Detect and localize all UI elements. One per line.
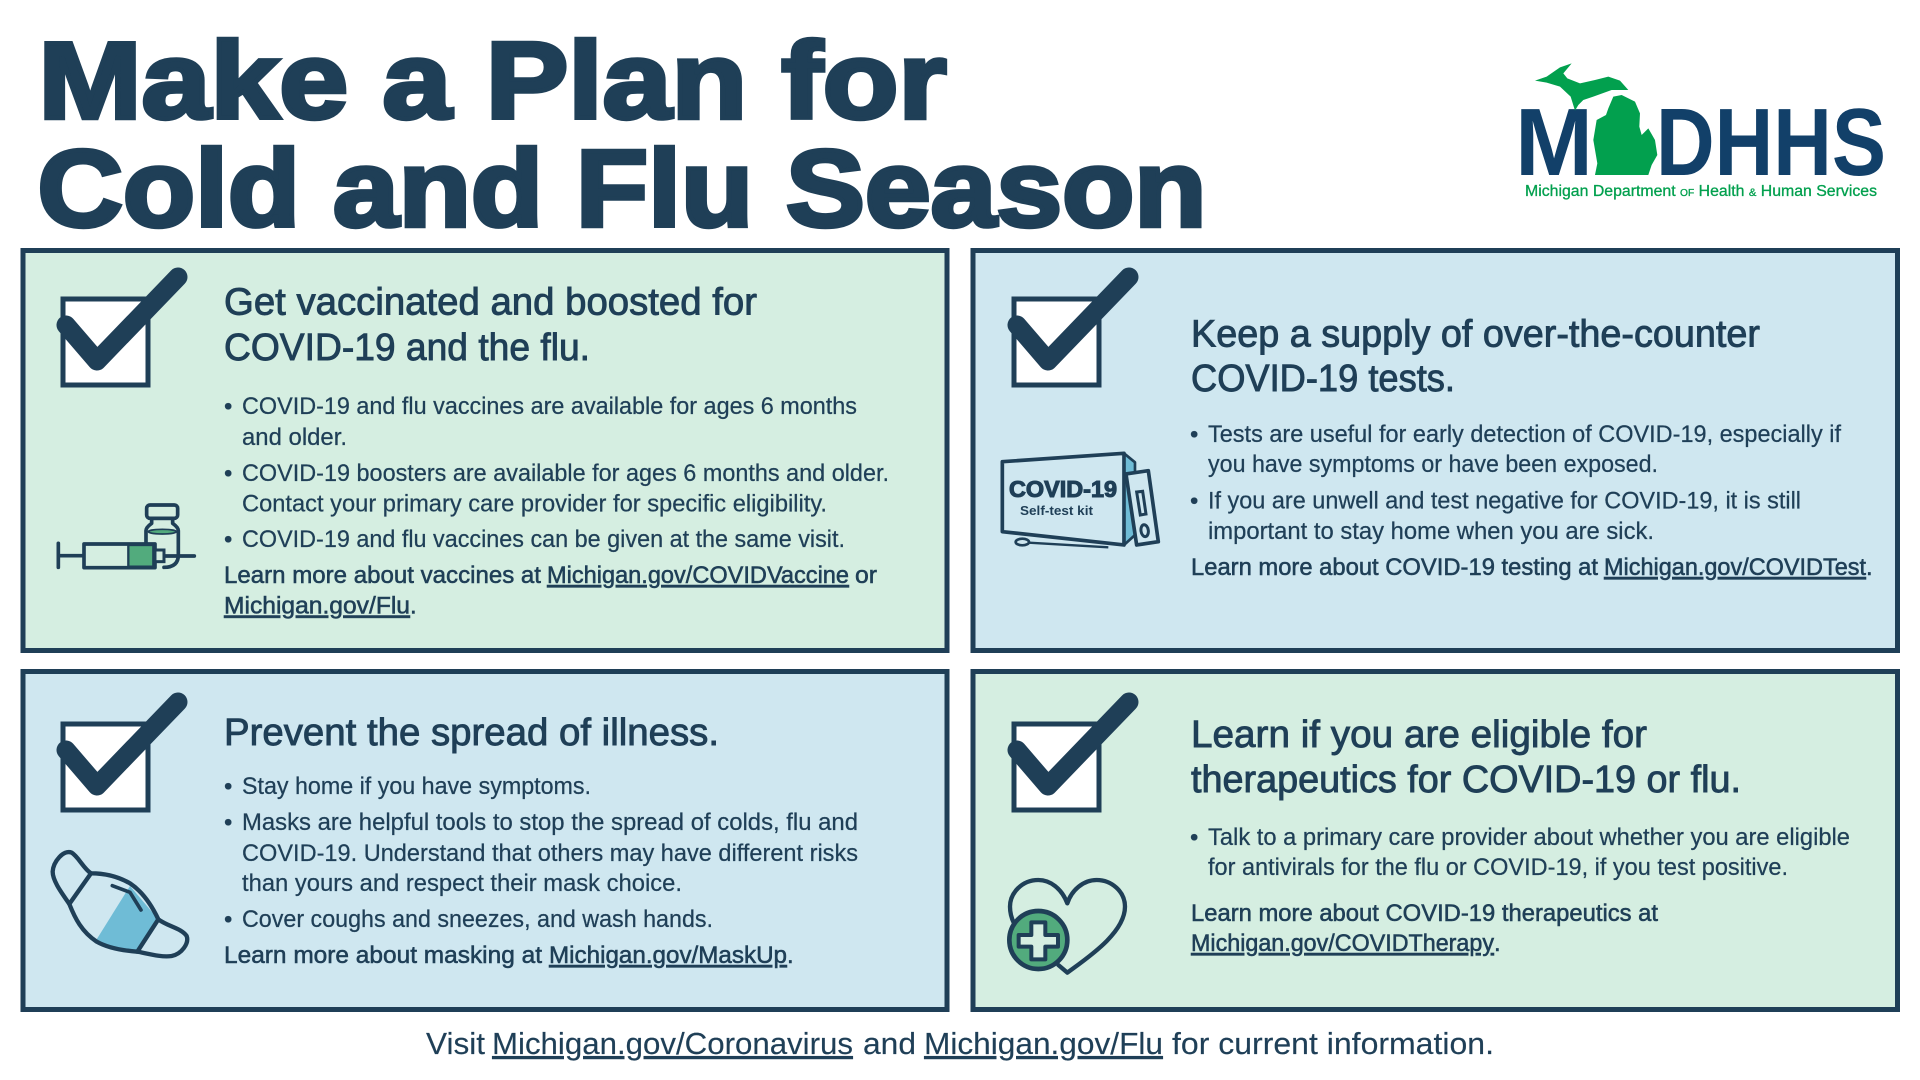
bullet list: • <box>224 773 232 800</box>
bullet list: • <box>1190 421 1198 448</box>
learn more link: . <box>410 592 417 620</box>
panel: prevent the spread <box>23 672 947 1010</box>
heading: therapeutics for COVID-19 or flu. <box>1191 759 1741 801</box>
heading: COVID-19 tests. <box>1191 358 1455 400</box>
panel: over-the-counter tests <box>973 250 1898 650</box>
footer note: Michigan.gov/Flu <box>924 1026 1163 1061</box>
bullet list <box>224 393 889 553</box>
heading: Get vaccinated and boosted for <box>224 282 757 324</box>
footer note: Visit <box>426 1026 485 1061</box>
learn more link: . <box>1866 554 1873 581</box>
icon: syringe and vial <box>58 505 194 568</box>
bullet list: • <box>224 809 232 836</box>
learn more link: Learn more about COVID-19 therapeutics at <box>1191 900 1658 927</box>
icon: heart with medical cross <box>1009 880 1125 973</box>
panel: therapeutics <box>973 672 1898 1010</box>
bullet list: Stay home if you have symptoms. <box>242 773 591 800</box>
logo: MDHHS: DHHS <box>1656 89 1886 196</box>
icon: checkbox <box>63 702 178 810</box>
heading: Keep a supply of over-the-counter <box>1191 314 1760 356</box>
bullet list: • <box>224 906 232 933</box>
bullet list: Talk to a primary care provider about whether you are eligible <box>1208 824 1850 851</box>
bullet list: • <box>1190 824 1198 851</box>
title <box>38 20 1206 250</box>
icon: checkbox <box>1014 277 1129 385</box>
icon: checkbox <box>1014 702 1129 810</box>
learn more link <box>224 942 794 969</box>
footer note <box>426 1026 1494 1061</box>
footer note: and <box>863 1026 916 1061</box>
bullet list: • <box>224 526 232 553</box>
bullet list <box>224 773 858 933</box>
heading <box>224 282 757 369</box>
bullet list: COVID-19 and flu vaccines can be given at the same visit. <box>242 526 845 553</box>
learn more link <box>1191 900 1658 957</box>
bullet list: and older. <box>242 424 347 451</box>
learn more link: . <box>787 942 794 969</box>
icon: Michigan map <box>1535 63 1657 175</box>
bullet list: you have symptoms or have been exposed. <box>1208 451 1658 478</box>
bullet list: for antivirals for the flu or COVID-19, if you test positive. <box>1208 854 1788 881</box>
learn more link: Learn more about COVID-19 testing at <box>1191 554 1598 581</box>
learn more link <box>224 562 877 620</box>
bullet list: Masks are helpful tools to stop the spread of colds, flu and <box>242 809 858 836</box>
icon: face mask <box>53 852 187 956</box>
bullet list: Tests are useful for early detection of COVID-19, especially if <box>1208 421 1841 448</box>
title: Cold and Flu Season <box>38 128 1206 250</box>
icon: COVID-19 self-test kit <box>1002 453 1158 547</box>
learn more link: Michigan.gov/Flu <box>224 592 410 620</box>
learn more link: or <box>855 562 877 589</box>
bullet list: COVID-19. Understand that others may have different risks <box>242 840 858 867</box>
bullet list: COVID-19 and flu vaccines are available for ages 6 months <box>242 393 857 420</box>
logo: MDHHS <box>1515 63 1886 200</box>
learn more link: Michigan.gov/COVIDTherapy <box>1191 930 1494 957</box>
heading: Learn if you are eligible for <box>1191 714 1647 756</box>
bullet list: • <box>1190 488 1198 514</box>
bullet list: Cover coughs and sneezes, and wash hands. <box>242 906 713 933</box>
bullet list: COVID-19 boosters are available for ages 6 months and older. <box>242 460 889 487</box>
learn more link: Michigan.gov/COVIDTest <box>1604 554 1866 581</box>
bullet list: important to stay home when you are sick. <box>1208 518 1654 545</box>
heading <box>1191 314 1760 400</box>
icon: COVID-19 self-test kit: Self-test kit <box>1020 504 1094 518</box>
learn more link: Learn more about vaccines at <box>224 562 541 589</box>
bullet list <box>1190 421 1841 545</box>
learn more link: Michigan.gov/MaskUp <box>549 942 787 969</box>
bullet list: Contact your primary care provider for specific eligibility. <box>242 490 827 518</box>
icon: checkbox <box>63 277 178 385</box>
heading: COVID-19 and the flu. <box>224 327 590 369</box>
icon: COVID-19 self-test kit: COVID-19 <box>1009 476 1117 502</box>
title: Make a Plan for <box>38 20 946 142</box>
bullet list: than yours and respect their mask choice. <box>242 870 682 897</box>
logo: MDHHS: M <box>1515 89 1593 196</box>
heading <box>1191 714 1741 801</box>
logo: MDHHS: Michigan Department OF Health & Human Services <box>1525 183 1877 200</box>
footer note: Michigan.gov/Coronavirus <box>492 1026 853 1061</box>
heading: Prevent the spread of illness. <box>224 712 719 754</box>
footer note: for current information. <box>1172 1026 1494 1061</box>
learn more link <box>1191 554 1873 581</box>
bullet list: If you are unwell and test negative for COVID-19, it is still <box>1208 488 1801 514</box>
learn more link: Learn more about masking at <box>224 942 542 969</box>
learn more link: Michigan.gov/COVIDVaccine <box>547 562 849 589</box>
bullet list: • <box>224 393 232 420</box>
bullet list: • <box>224 460 232 487</box>
bullet list <box>1190 824 1850 881</box>
panel: get vaccinated <box>23 250 947 650</box>
learn more link: . <box>1494 930 1501 957</box>
